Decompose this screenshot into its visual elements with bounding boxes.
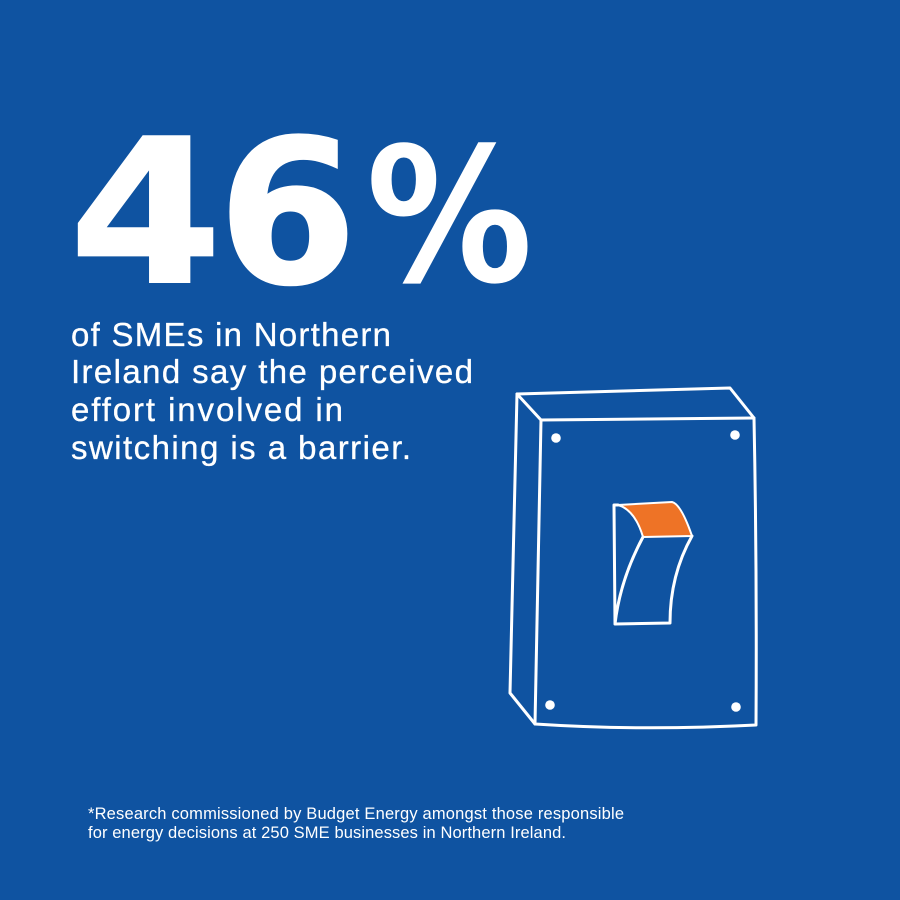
statement text: switching is a barrier. [71,429,411,466]
statement text: of SMEs in Northern [71,316,391,353]
box outline [510,388,756,728]
headline figure: 46%: 6 [218,97,357,330]
switch top, orange [618,502,692,537]
statement text: Ireland say the perceived [71,353,473,390]
statement text: effort involved in [71,391,343,428]
footnote: for energy decisions at 250 SME businesses in Northern Ireland. [88,824,566,842]
headline figure: 46% [69,97,533,330]
headline figure: 46%: % [366,108,533,325]
switch body [614,505,692,624]
footnote [88,805,624,842]
screw holes [545,430,741,712]
box front edges [517,394,754,724]
footnote: *Research commissioned by Budget Energy amongst those responsible [88,805,624,823]
icon: electrical switch box [510,388,756,728]
statement text [71,316,473,466]
headline figure: 46%: 4 [69,97,222,330]
